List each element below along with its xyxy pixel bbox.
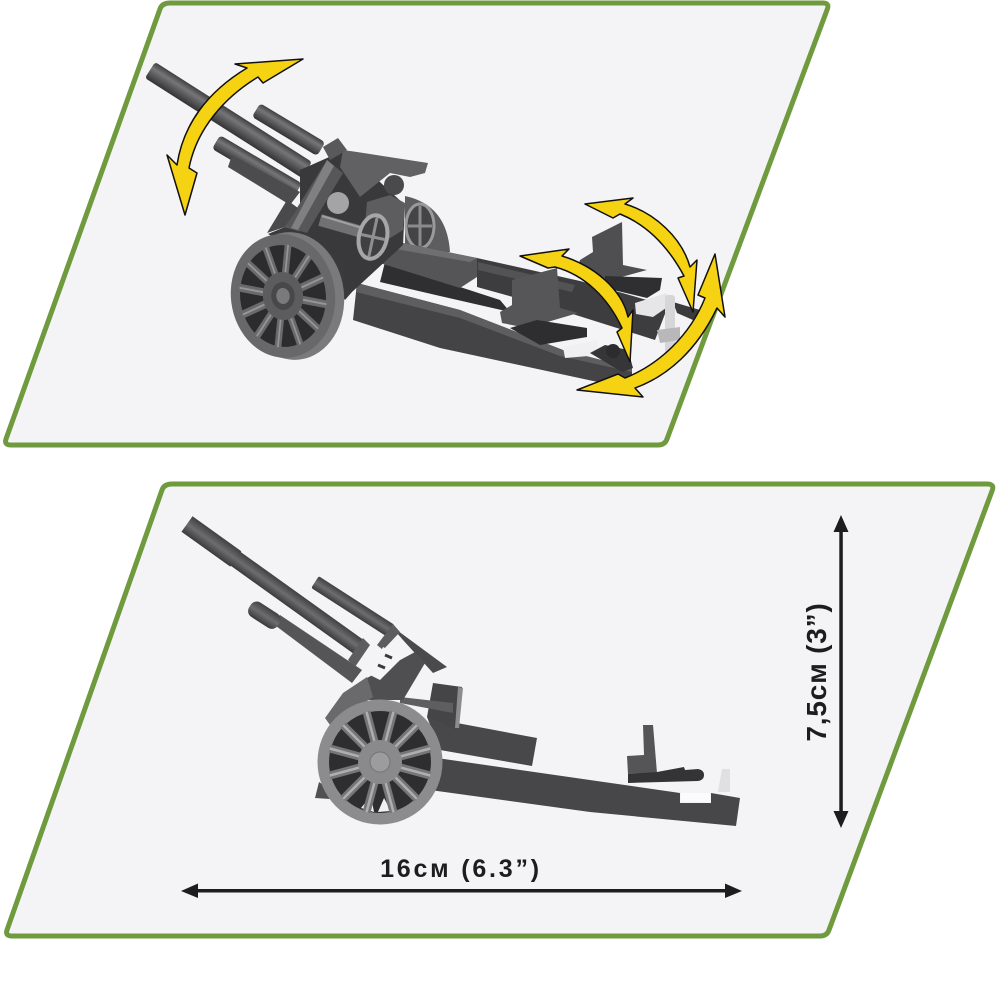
top barrel <box>311 576 394 637</box>
lower trail <box>430 757 740 826</box>
dimension: width label: 16см (6.3”) <box>380 855 542 883</box>
carriage band <box>267 138 347 292</box>
dimension: width arrow <box>181 884 742 898</box>
recoil housing <box>400 683 463 730</box>
cradle wedge <box>390 625 447 673</box>
panel: articulation view <box>6 3 828 445</box>
lower trail <box>353 283 632 384</box>
carriage frame <box>315 624 425 800</box>
handwheel <box>355 213 391 261</box>
near spade <box>500 268 587 345</box>
upper trail <box>427 717 537 766</box>
carriage mass <box>300 150 405 300</box>
panel: dimensions view <box>7 484 993 936</box>
spade <box>627 725 657 774</box>
dimension: height label: 7,5см (3”) <box>801 602 832 742</box>
main barrel <box>181 516 368 657</box>
arrow: barrel elevation <box>167 59 303 215</box>
wedge shield <box>340 150 428 197</box>
far wheel <box>405 196 450 255</box>
main barrel <box>145 62 312 178</box>
crew head detail <box>384 175 404 195</box>
white bracket <box>681 793 710 802</box>
howitzer model, three-quarter view <box>145 62 700 384</box>
breech box <box>365 195 405 240</box>
under-beam shadow <box>380 262 510 312</box>
rear peg <box>718 769 730 792</box>
lower barrel <box>212 135 302 205</box>
upper barrel <box>252 103 325 156</box>
elevation gear and rod <box>320 192 362 232</box>
near wheel <box>224 226 351 366</box>
wheel <box>318 700 442 824</box>
dimension: height arrow <box>834 515 848 828</box>
spade lever <box>628 767 704 783</box>
arrow: rear spade swing, middle <box>520 249 633 362</box>
arrow: rear spade swing, upper <box>585 198 697 312</box>
near white bracket and plate <box>563 340 633 372</box>
arrow: trail traverse <box>577 254 725 397</box>
lower barrel <box>245 599 362 683</box>
far spade <box>575 222 662 298</box>
far white bracket and peg <box>635 293 700 353</box>
howitzer model, side view <box>181 516 740 826</box>
upper trail <box>380 240 668 340</box>
